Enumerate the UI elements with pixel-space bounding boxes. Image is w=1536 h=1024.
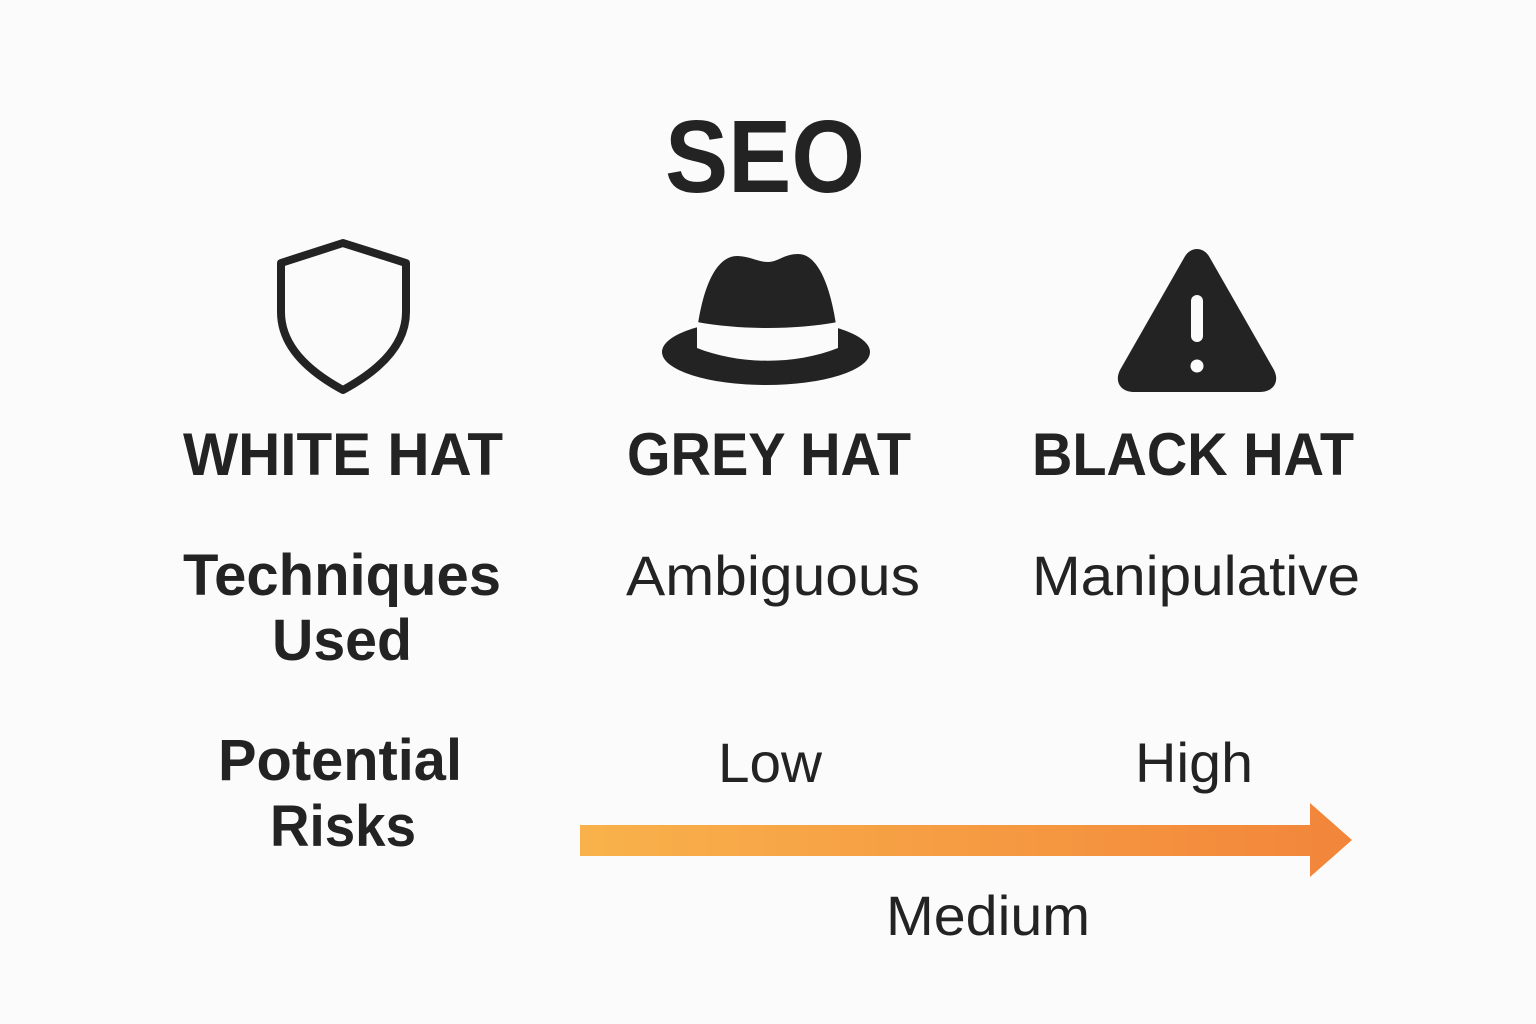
label: techniques used: Used	[272, 608, 412, 673]
label: potential risks: Risks	[270, 794, 416, 859]
label: potential risks	[218, 728, 462, 859]
heading: grey hat: GREY HAT	[627, 421, 911, 488]
title: SEO	[665, 99, 865, 214]
label: techniques used	[183, 543, 501, 673]
text: ambiguous: Ambiguous	[626, 544, 920, 607]
label: potential risks: Potential	[218, 728, 462, 793]
icon: warning triangle	[1118, 249, 1276, 392]
icon: hat	[662, 254, 870, 385]
text: manipulative: Manipulative	[1032, 544, 1360, 607]
icon: shield	[281, 243, 406, 390]
arrow: risk scale	[580, 803, 1352, 877]
heading: white hat: WHITE HAT	[183, 421, 503, 488]
label: techniques used: Techniques	[183, 543, 501, 608]
text: high: High	[1135, 731, 1253, 794]
text: medium: Medium	[886, 884, 1090, 947]
heading: black hat: BLACK HAT	[1032, 421, 1354, 488]
text: low: Low	[718, 731, 823, 794]
